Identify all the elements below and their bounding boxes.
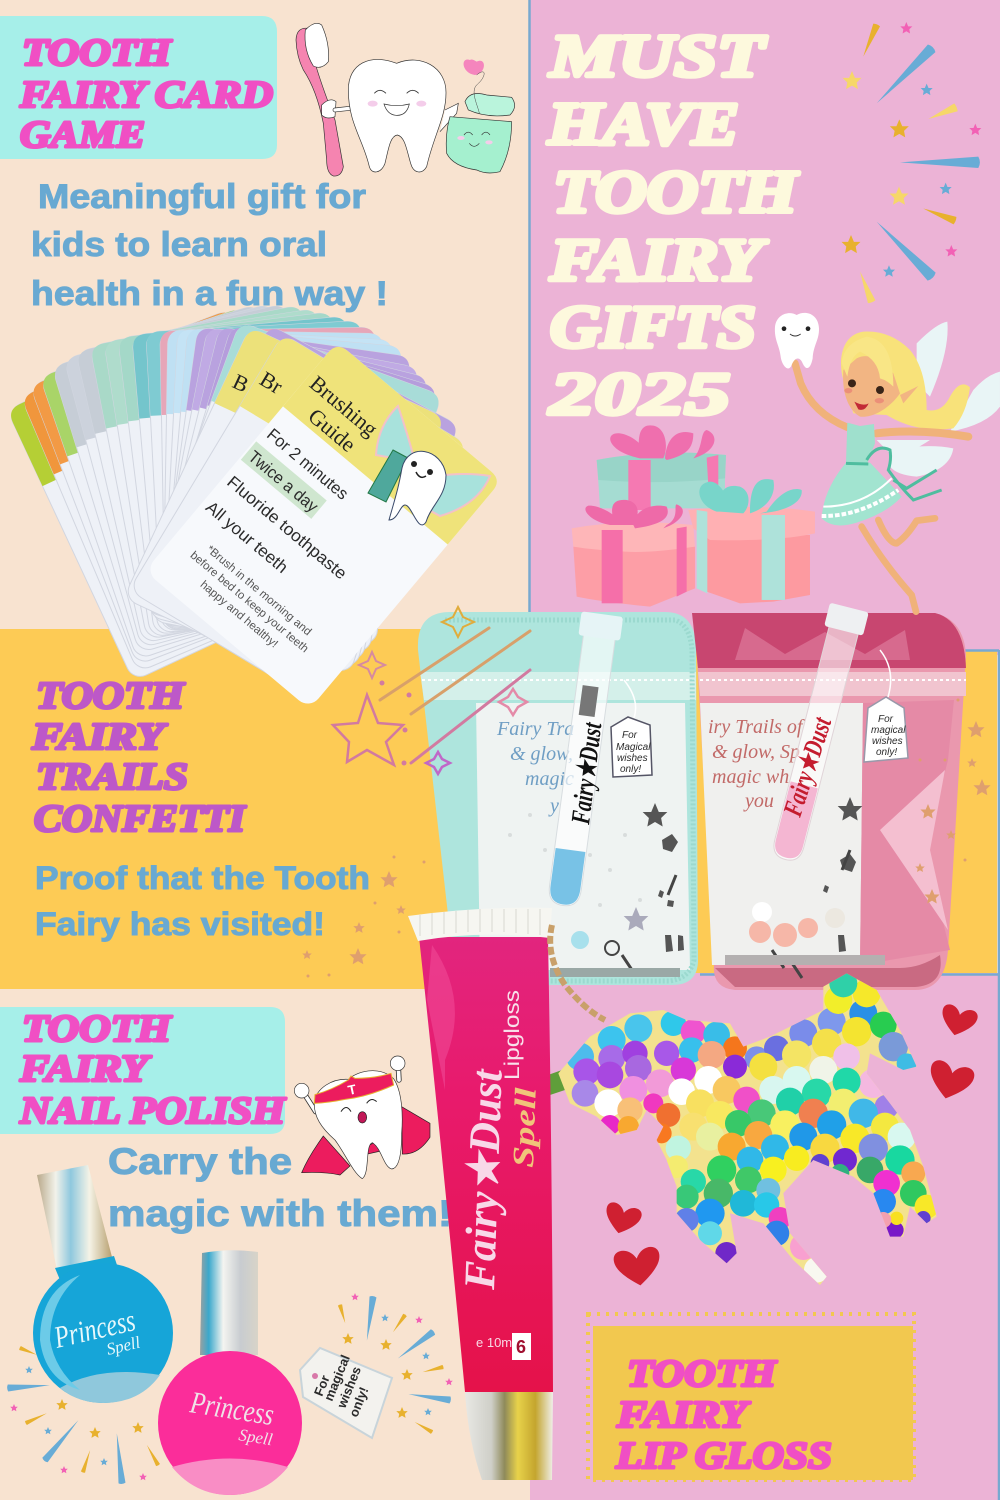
heading: lip gloss: TOOTH (627, 1353, 778, 1395)
text: confetti description: Proof that the Tooth (35, 860, 370, 896)
hero headband (314, 1073, 394, 1103)
tube label: Fairy★Dust (777, 713, 838, 821)
panel: confetti yellow band (0, 629, 997, 989)
fairy dress (822, 423, 942, 525)
hero fists (294, 1056, 405, 1098)
pouch text (708, 716, 805, 812)
card: brushing guide (145, 342, 502, 709)
icon: fairy with tooth (775, 313, 1000, 612)
decoration: nail polish bursts (7, 1293, 453, 1484)
illustration: pink nail polish bottle (158, 1250, 302, 1495)
text: nail polish description: Carry the (108, 1141, 292, 1182)
tag (864, 650, 908, 762)
panel: title background pink (530, 0, 1000, 655)
divider lines (530, 0, 999, 1500)
title (547, 23, 800, 427)
text: card game description: Meaningful gift for (38, 178, 366, 216)
gift: back mint box (597, 425, 726, 510)
illustration: fan of cards (7, 303, 502, 709)
tube lipgloss: Lipgloss (501, 990, 524, 1080)
icon: green tail tip beside tube (548, 1070, 565, 1095)
heading: nail polish (19, 1008, 287, 1132)
heading: confetti (31, 675, 246, 840)
icon: superhero tooth (294, 1056, 430, 1179)
card footnote: before bed to keep your teeth (188, 550, 310, 655)
tube brand: Fairy★Dust (455, 1067, 512, 1291)
icon: shooting star outline and trails (333, 607, 530, 774)
illustration: blue nail polish bottle: Spell (105, 1333, 142, 1359)
tube label: Fairy★Dust (565, 720, 608, 826)
card footnote: happy and healthy! (198, 579, 280, 650)
icon: smiling tooth (348, 60, 458, 172)
pouch text: magic wh (712, 766, 789, 788)
tag text: For (311, 1373, 333, 1398)
tag: only! (876, 747, 897, 758)
heading: nail polish: TOOTH (22, 1008, 173, 1050)
illustration: pink confetti pouch (692, 603, 966, 990)
glitter (508, 813, 680, 977)
card list (202, 425, 390, 609)
pouch text: Fairy Tra (496, 718, 574, 740)
tag (611, 680, 652, 777)
card title: Brushing (305, 370, 383, 441)
pouch text: iry Trails of (708, 716, 805, 738)
pouch text: magic (525, 768, 574, 790)
illustration: sequin unicorn keychain (550, 969, 943, 1290)
bottle label: Princess (50, 1302, 138, 1355)
heading: card game: GAME (20, 114, 145, 156)
text: nail polish description (108, 1141, 452, 1234)
card list: All your teeth (202, 498, 292, 577)
tube number (512, 1333, 531, 1360)
heading: lip gloss (615, 1353, 832, 1477)
confetti tube (542, 611, 623, 908)
heading: lip gloss: FAIRY (616, 1394, 751, 1436)
illustration: blue confetti pouch (418, 611, 698, 985)
hero arms (306, 1067, 399, 1112)
illustration: gift boxes (572, 425, 815, 607)
card footnote: *Brush in the morning and (204, 544, 313, 638)
icon: winged tooth sticker (368, 406, 490, 525)
text: confetti description: Fairy has visited! (35, 906, 325, 942)
fairy wings (877, 322, 1000, 477)
tag text (311, 1353, 371, 1419)
fairy tooth (775, 313, 819, 368)
heading: card game (19, 32, 273, 156)
tube spell: Spell (507, 1086, 543, 1168)
card list: Twice a day (245, 447, 322, 516)
title: 2025 (548, 361, 730, 427)
hero cape (302, 1107, 430, 1175)
fairy arms (795, 363, 968, 437)
hero tooth body (314, 1071, 402, 1179)
icon: magical wishes tag (300, 1348, 392, 1438)
tag: For (878, 714, 894, 725)
tag: only! (620, 764, 641, 775)
icon: dental floss (446, 59, 515, 173)
tag text: wishes (333, 1364, 364, 1411)
tag: wishes (872, 736, 903, 747)
tube number: 6 (516, 1337, 526, 1357)
tag text: magical (321, 1353, 353, 1403)
tag: wishes (617, 753, 648, 764)
heading: card game: TOOTH (22, 32, 173, 74)
icon: key chain (550, 925, 605, 1020)
heading: confetti: CONFETTI (34, 798, 246, 840)
tube size: e 10ml. (476, 1335, 519, 1350)
text: nail polish description: magic with them! (108, 1193, 452, 1234)
fairy hair back (841, 332, 970, 429)
pouch text: you (743, 790, 774, 812)
panel: nail polish label (0, 1007, 287, 1134)
heading: nail polish: NAIL POLISH (19, 1090, 287, 1132)
card title: Guide (304, 403, 361, 457)
icon: toothbrush (296, 23, 350, 176)
pouch text: y (548, 795, 559, 817)
heading: nail polish: FAIRY (19, 1048, 152, 1090)
panel: lip gloss label (588, 1314, 914, 1480)
heading: confetti: TRAILS (36, 756, 188, 798)
illustration: blue nail polish bottle (33, 1165, 173, 1403)
panel: card game label (0, 16, 277, 159)
pouch text: & glow, Sp (712, 741, 800, 763)
decoration: burst rays and stars (841, 22, 981, 304)
heading: lip gloss: LIP GLOSS (615, 1435, 832, 1477)
fairy face (842, 337, 918, 417)
title: HAVE (547, 91, 739, 157)
title: TOOTH (553, 159, 800, 225)
icon: toothbrush, tooth and floss group (296, 23, 515, 176)
illustration: lip gloss tube (408, 908, 553, 1480)
fairy legs (862, 518, 935, 612)
title: FAIRY (549, 227, 769, 293)
gift: right pink box (688, 479, 815, 603)
pouch charms (605, 803, 684, 973)
title: GIFTS (550, 294, 756, 360)
headband letter: T (346, 1082, 358, 1098)
pouch charms (772, 797, 862, 978)
tag: magical (871, 725, 906, 736)
confetti tube (766, 603, 869, 864)
bottle label: Princess (187, 1384, 276, 1432)
card list: For 2 minutes (263, 425, 352, 504)
text: card game description: kids to learn oral (31, 226, 327, 264)
decoration: confetti stars in yellow band (302, 698, 991, 978)
gift: left pink box (572, 500, 695, 607)
heading: confetti: TOOTH (36, 675, 186, 717)
card list: Fluoride toothpaste (223, 472, 350, 583)
tag text: only! (346, 1385, 371, 1419)
pouch text: & glow, (510, 743, 573, 765)
text: card game description: health in a fun way ! (31, 275, 388, 313)
hero face (341, 1100, 377, 1112)
panel: lip gloss pink background (530, 973, 1000, 1500)
text: confetti description (35, 860, 370, 942)
illustration: fan of cards: B (229, 368, 253, 397)
tag: For (622, 730, 638, 741)
icon: hearts (601, 1003, 979, 1289)
illustration: fan of cards: Br (256, 366, 288, 399)
tag: Magical (616, 742, 651, 753)
heading: confetti: FAIRY (31, 716, 169, 758)
pouch text (496, 718, 574, 817)
text: card game description (31, 178, 388, 313)
pom poms (725, 902, 885, 965)
title: MUST (549, 23, 767, 89)
hero mouth (358, 1112, 367, 1123)
heading: card game: FAIRY CARD (19, 74, 273, 116)
illustration: pink nail polish bottle: Spell (237, 1425, 274, 1449)
